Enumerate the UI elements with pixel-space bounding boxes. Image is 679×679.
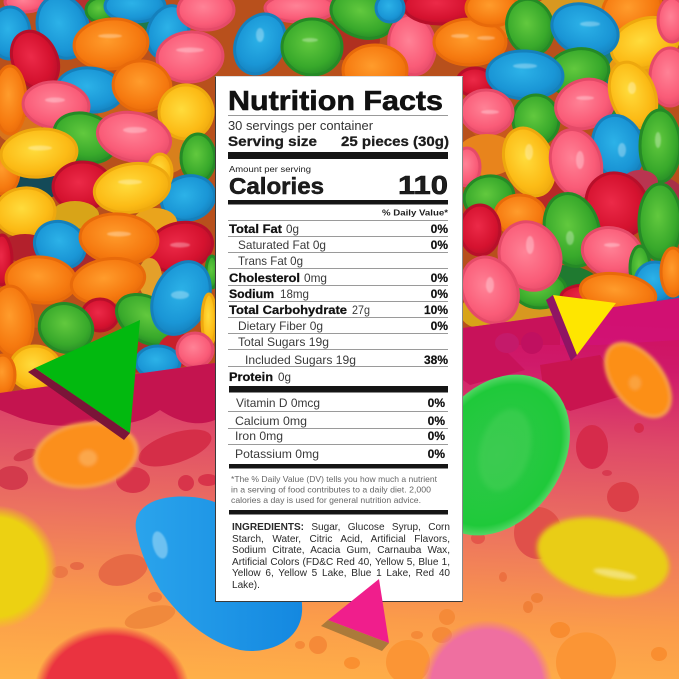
paint splatters xyxy=(0,315,667,679)
ingredients: Starch, Water, Citric Acid, Artificial Flavors, xyxy=(232,534,450,545)
row: vitamin d xyxy=(236,396,445,410)
row: iron: Iron 0mg xyxy=(235,429,283,443)
row: total sugars: Total Sugars 19g xyxy=(238,335,329,349)
bean highlights xyxy=(28,22,661,299)
row: total carbohydrate xyxy=(229,303,448,317)
green bean xyxy=(394,346,600,564)
pink blurred bean, bottom xyxy=(418,615,556,679)
ingredients: Yellow 6, Yellow 5 Lake, Blue 1 Lake, Red 40 xyxy=(232,568,450,579)
row: total fat: Total Fat xyxy=(229,222,282,236)
row: total fat: 0g xyxy=(286,222,299,236)
serving size: Serving size xyxy=(228,134,318,149)
row: sodium: 0% xyxy=(431,287,448,301)
ingredients: Lake). xyxy=(232,580,260,591)
row: potassium: 0% xyxy=(428,447,445,461)
daily value header: % Daily Value* xyxy=(382,208,449,218)
row: cholesterol: Cholesterol xyxy=(229,271,300,285)
orange blurred bean, right xyxy=(590,329,679,431)
row: included sugars: 38% xyxy=(424,353,448,367)
row: iron: 0% xyxy=(428,429,445,443)
serving size xyxy=(228,134,449,149)
row: total carbohydrate: Total Carbohydrate xyxy=(229,303,347,317)
ingredients: INGREDIENTS: Sugar, Glucose Syrup, Corn xyxy=(232,522,450,533)
row: potassium xyxy=(235,447,445,461)
row: saturated fat: 0% xyxy=(431,238,448,252)
footnote xyxy=(231,474,438,505)
triangle shadow: yellow xyxy=(546,295,577,361)
serving size: 25 pieces (30g) xyxy=(341,134,449,149)
row: dietary fiber xyxy=(238,319,448,333)
row: iron xyxy=(235,429,445,443)
servings per container: 30 servings per container xyxy=(228,119,373,133)
calories xyxy=(229,172,448,200)
row: protein xyxy=(229,370,291,384)
row: trans fat: Trans Fat 0g xyxy=(238,254,303,268)
row: saturated fat: Saturated Fat 0g xyxy=(238,238,326,252)
footnote: calories a day is used for general nutrition advice. xyxy=(231,495,421,505)
red blurred bean, bottom xyxy=(30,620,195,679)
row: vitamin d: Vitamin D 0mcg xyxy=(236,396,320,410)
orange blurred bean, left xyxy=(29,415,143,495)
triangle: green xyxy=(35,320,140,433)
row: sodium: 18mg xyxy=(280,287,309,301)
row: included sugars: Included Sugars 19g xyxy=(245,353,356,367)
triangle: pink xyxy=(328,579,389,643)
footnote: in a serving of food contributes to a daily diet. 2,000 xyxy=(231,484,431,494)
row: vitamin d: 0% xyxy=(428,396,445,410)
row: saturated fat xyxy=(238,238,448,252)
title: Nutrition Facts xyxy=(228,85,443,116)
row: sodium xyxy=(229,287,448,301)
row: protein: 0g xyxy=(278,370,291,384)
row: calcium: 0% xyxy=(428,414,445,428)
ingredients xyxy=(232,522,450,591)
yellow blurred bean, right xyxy=(530,506,676,608)
row: potassium: Potassium 0mg xyxy=(235,447,319,461)
row: calcium xyxy=(235,414,445,428)
row: cholesterol xyxy=(229,271,448,285)
row: calcium: Calcium 0mg xyxy=(235,414,307,428)
panel: nutrition facts label xyxy=(215,76,463,602)
calories: 110 xyxy=(398,172,448,200)
jelly bean pile, centre strip and right xyxy=(225,0,679,332)
row: total fat: 0% xyxy=(431,222,448,236)
blue bean xyxy=(136,497,302,651)
row: total carbohydrate: 27g xyxy=(352,303,370,317)
footnote: *The % Daily Value (DV) tells you how much a nutrient xyxy=(231,474,438,484)
row: dietary fiber: Dietary Fiber 0g xyxy=(238,319,323,333)
triangle shadow: green xyxy=(28,368,130,440)
row: cholesterol: 0% xyxy=(431,271,448,285)
row: protein: Protein xyxy=(229,370,273,384)
row: total carbohydrate: 10% xyxy=(424,303,448,317)
row: included sugars xyxy=(245,353,448,367)
row: dietary fiber: 0% xyxy=(431,319,448,333)
triangle: yellow xyxy=(553,295,616,355)
yellow blurred bean, left xyxy=(0,500,60,635)
row: total fat xyxy=(229,222,448,236)
amount per serving: Amount per serving xyxy=(229,164,311,174)
ingredients: Artificial Colors (FD&C Red 40, Yellow 5, Blue 1, xyxy=(232,557,450,568)
row: cholesterol: 0mg xyxy=(304,271,327,285)
ingredients: Sodium Citrate, Acacia Gum, Carnauba Wax, xyxy=(232,545,450,556)
dim beans filling gaps in the pile xyxy=(0,0,679,376)
row: sodium: Sodium xyxy=(229,287,274,301)
calories: Calories xyxy=(229,173,324,199)
jelly bean pile, left xyxy=(0,0,234,395)
triangle shadow: pink xyxy=(321,620,389,651)
gradient backdrop xyxy=(0,298,679,679)
